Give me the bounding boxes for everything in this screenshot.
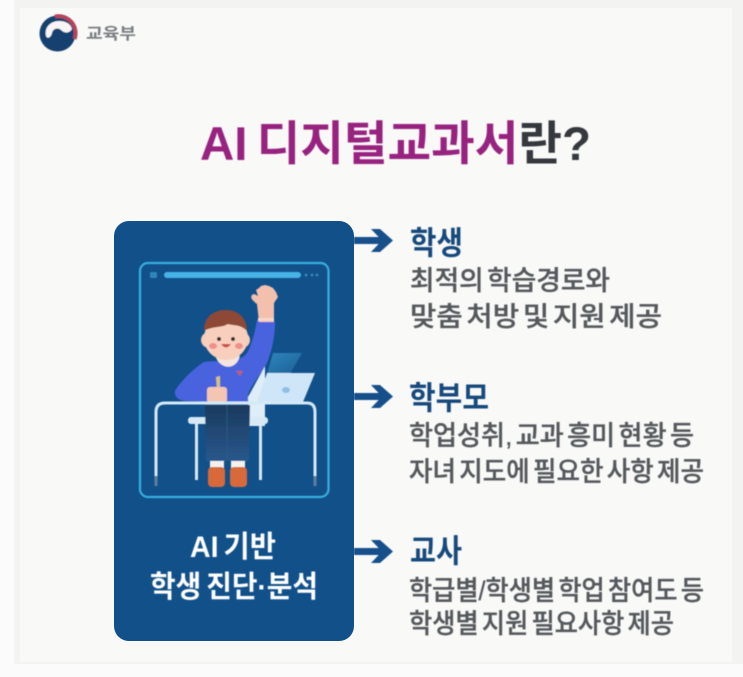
description: parents: 학업성취, 교과 흥미 현황 등 [409,421,694,451]
description: students [410,266,662,332]
text block: parents [409,380,704,487]
body and raised arm [175,320,275,402]
shoes [208,467,247,487]
desk [156,403,315,476]
heading: teachers: 교사 [410,533,462,569]
legs [205,405,250,461]
arrow: to teachers [354,540,393,563]
chair seat [188,417,268,480]
text block: students [410,225,662,332]
laptop [257,353,315,402]
screen top bar [150,272,318,278]
heart badge [236,371,243,376]
text block: teachers [409,533,704,639]
head [201,310,250,360]
socks [210,461,245,468]
description: parents: 자녀 지도에 필요한 사항 제공 [409,457,704,487]
neck collar [216,350,240,367]
logo: Ministry of Education [40,16,136,52]
raised hand [251,285,278,322]
illustration: student at desk [140,263,328,497]
description: teachers: 학생별 지원 필요사항 제공 [409,609,674,639]
heading: students: 학생 [410,225,463,261]
screen frame [140,263,328,497]
cuff [258,318,274,321]
description: parents [409,421,704,487]
heading: parents: 학부모 [409,380,489,416]
logo text: 교육부 [86,25,136,43]
description: teachers [409,576,704,639]
description: students: 최적의 학습경로와 [410,266,610,296]
description: teachers: 학급별/학생별 학업 참여도 등 [409,576,704,606]
arrow: to students [354,229,393,252]
panel: AI analysis card [114,221,354,641]
icon: taegeuk emblem [40,16,76,52]
panel caption: 학생 진단·분석 [150,571,318,604]
description: students: 맞춤 처방 및 지원 제공 [410,302,662,332]
chair back [248,366,265,426]
panel caption [150,531,318,604]
arrow: to parents [354,385,393,408]
panel caption: AI 기반 [190,531,276,564]
writing hand and pencil [207,376,227,403]
title: AI 디지털교과서란? [200,117,591,170]
